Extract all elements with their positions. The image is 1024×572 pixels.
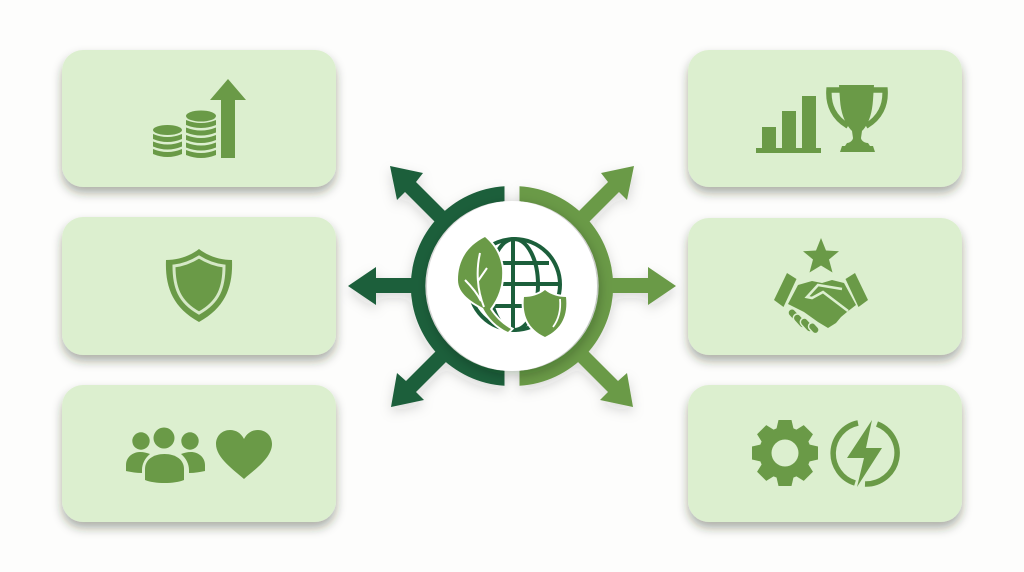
icon: shield <box>166 249 232 322</box>
arrows: left group <box>348 166 504 407</box>
ring: right half <box>520 186 613 386</box>
panel: top right performance <box>688 50 962 187</box>
panel: middle left protection <box>62 217 336 355</box>
icon: trophy <box>829 85 885 152</box>
panel: middle right partnership <box>688 218 962 355</box>
icon: group of people <box>126 428 205 483</box>
icon: heart <box>216 430 272 479</box>
panel: bottom right operations and energy <box>688 385 962 522</box>
card background <box>688 385 962 522</box>
white centre circle <box>427 201 597 371</box>
panel: top left finance growth <box>62 50 336 187</box>
icon: bar chart <box>756 96 821 153</box>
arrows: right group <box>520 166 676 407</box>
card background <box>688 50 962 187</box>
central hub <box>348 166 676 407</box>
icon: handshake <box>774 273 868 335</box>
panel: bottom left people and care <box>62 385 336 522</box>
card background <box>62 217 336 355</box>
ring: left half <box>411 186 504 386</box>
icon: energy bolt in ring <box>833 420 897 487</box>
icon: globe, leaf and shield <box>458 237 566 337</box>
card background <box>688 218 962 355</box>
card background <box>62 385 336 522</box>
icon: coin stacks with up arrow <box>153 79 246 158</box>
icon: gear <box>752 420 818 486</box>
icon: star <box>803 238 839 272</box>
card background <box>62 50 336 187</box>
